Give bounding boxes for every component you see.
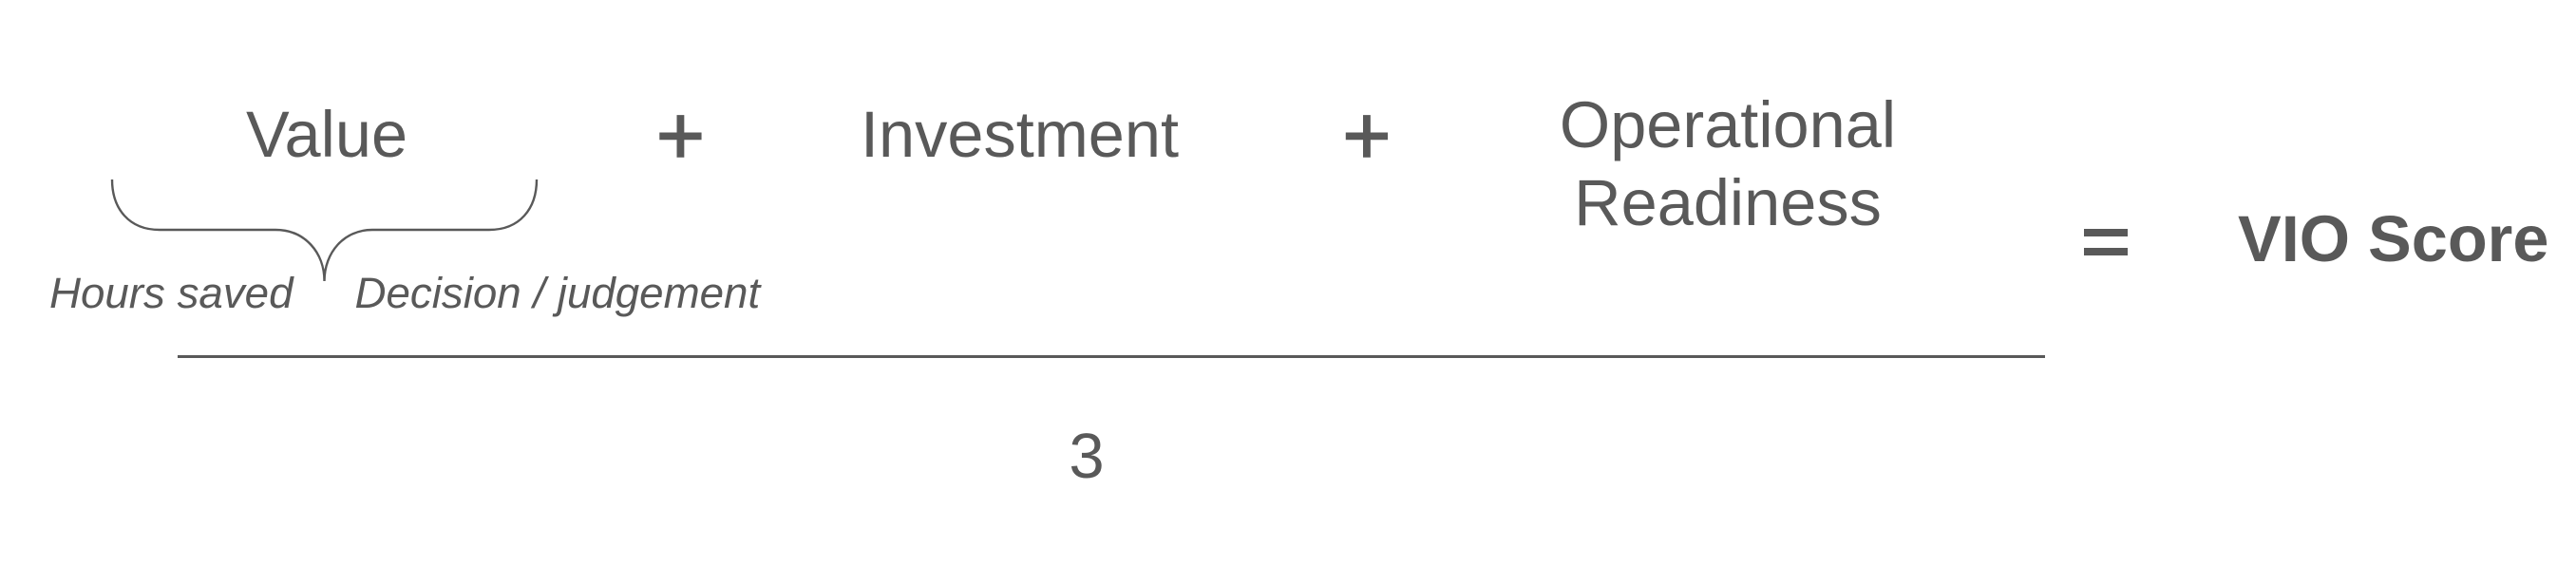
term: Operational Readiness: Operational bbox=[1560, 88, 1896, 161]
term: Value: Value bbox=[246, 98, 407, 171]
label: Decision / judgement: Decision / judgement bbox=[355, 269, 762, 317]
term: Investment: Investment bbox=[861, 98, 1179, 171]
term: Operational Readiness: Readiness bbox=[1574, 166, 1882, 239]
plus sign 1: + bbox=[656, 88, 705, 182]
equals sign bbox=[2084, 229, 2128, 255]
curly brace under Value bbox=[112, 179, 537, 281]
result: VIO Score: VIO Score bbox=[2238, 202, 2548, 275]
fraction line bbox=[178, 355, 2045, 358]
label: Hours saved: Hours saved bbox=[49, 269, 294, 317]
plus sign 2: + bbox=[1342, 88, 1392, 182]
denominator: 3: 3 bbox=[1069, 421, 1105, 492]
term: Operational Readiness bbox=[1560, 88, 1896, 239]
